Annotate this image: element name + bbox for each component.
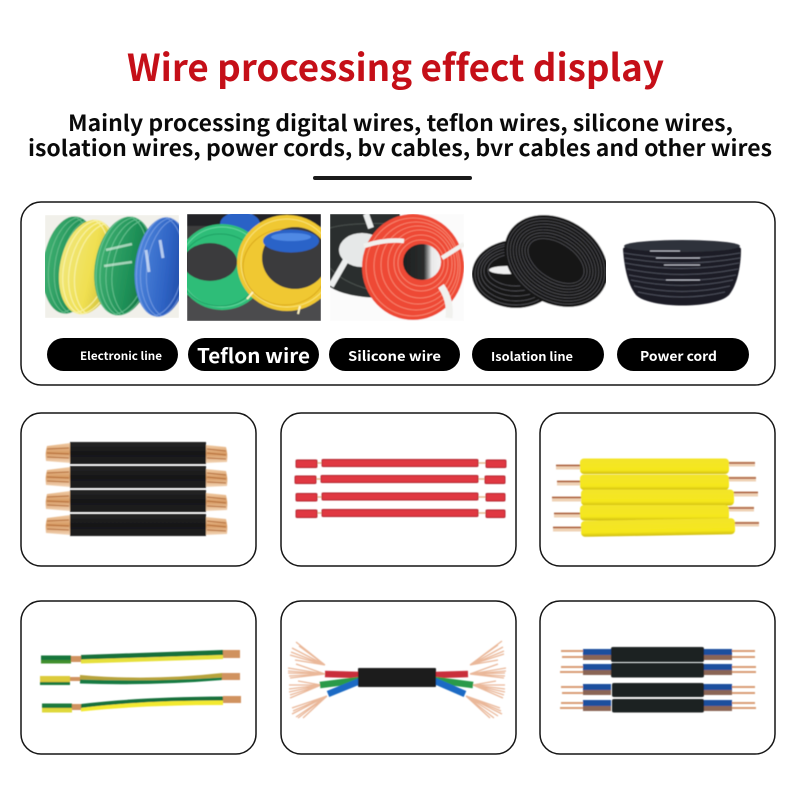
photo: teflon wire coils (187, 214, 321, 321)
panel: green-yellow earth wires (21, 601, 256, 754)
label: isolation line (472, 338, 604, 371)
photo: power cord coil (623, 240, 741, 306)
subtitle: Mainly processing digital wires, teflon wires, silicone wires, (68, 106, 733, 138)
subtitle (28, 106, 772, 163)
photo: isolation line coils (472, 214, 606, 309)
label: power cord: Power cord (640, 345, 717, 365)
sample: four blue-brown sheathed cables (560, 647, 756, 712)
subtitle: isolation wires, power cords, bv cables, bvr cables and other wires (28, 131, 772, 163)
label: silicone wire: Silicone wire (348, 345, 441, 365)
panel: black stripped wires (21, 413, 256, 566)
heading divider (313, 176, 472, 180)
panel: yellow stripped wires (540, 413, 775, 566)
sample: five yellow wires with copper conductors (552, 458, 759, 537)
wire three (42, 696, 223, 712)
panel: multi-core cable (281, 601, 516, 754)
photo: electronic line coils (45, 215, 179, 318)
sample: four red wires (295, 460, 506, 518)
panel: red stripped wires (281, 413, 516, 566)
label: teflon wire: Teflon wire (197, 340, 310, 369)
sample: four black cables with copper ends (46, 442, 227, 536)
title: Wire processing effect display (127, 38, 664, 92)
sample: three green-yellow wires (40, 650, 241, 712)
label: electronic line (47, 338, 178, 371)
label: silicone wire (329, 338, 460, 371)
sample: multi-core sheathed cable with fanned strands (288, 641, 506, 718)
label: electronic line: Electronic line (80, 348, 162, 364)
panel: blue-brown sheathed wires (540, 601, 775, 754)
label: isolation line: Isolation line (491, 348, 573, 365)
label: power cord (617, 338, 749, 371)
wire one (41, 650, 223, 664)
wire two (40, 673, 222, 685)
photo: silicone wire coils (330, 214, 464, 321)
panel: wire types (21, 196, 775, 385)
